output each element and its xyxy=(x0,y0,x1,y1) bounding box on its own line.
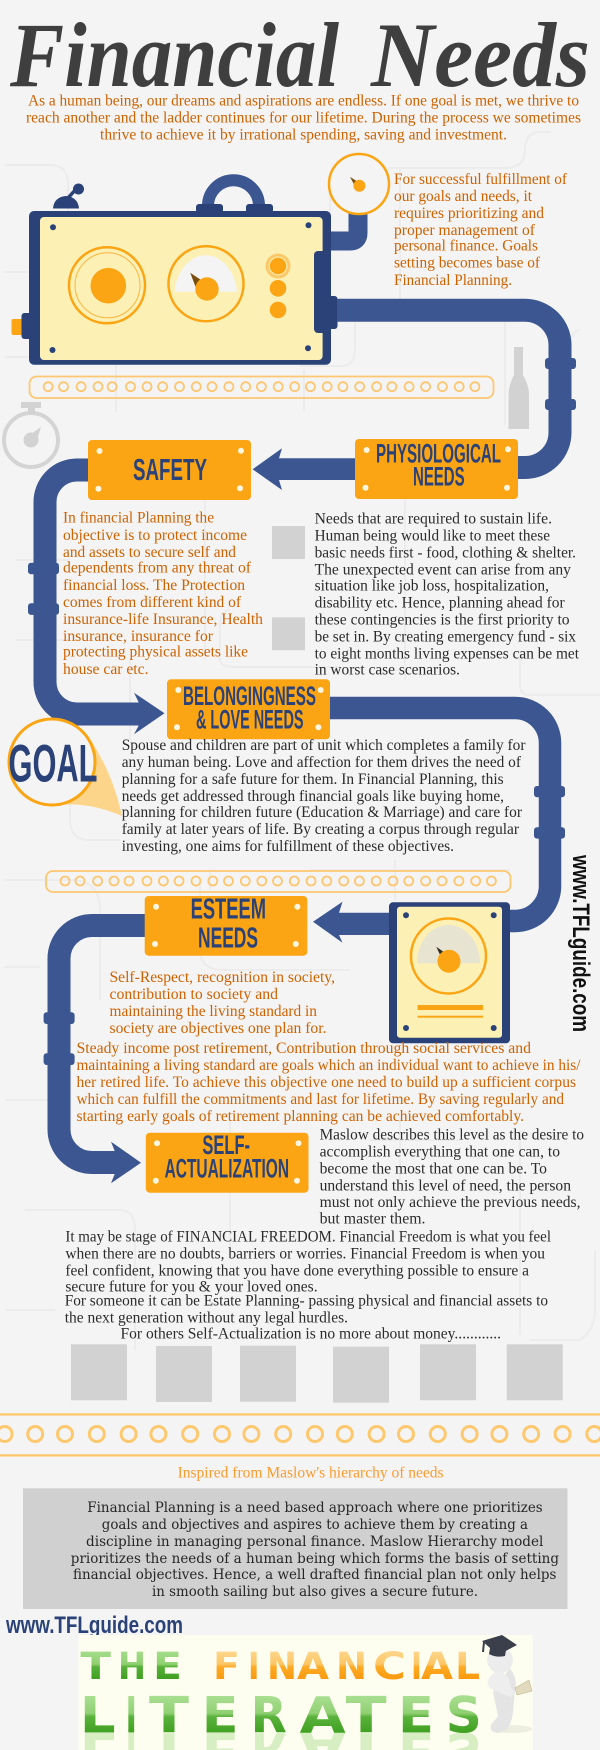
logo: the financial literates: N xyxy=(336,1645,367,1688)
machine xyxy=(12,154,389,365)
text: maslow description xyxy=(320,1127,584,1228)
logo: the financial literates: A xyxy=(300,1687,347,1745)
plate: belongingness and love needs: BELONGINGNESS xyxy=(183,681,316,711)
panel: conclusion: Financial Planning is a need based approach where one prioritizes xyxy=(87,1500,543,1516)
pipe: gauge link xyxy=(331,210,358,241)
text: retirement goals xyxy=(76,1040,581,1125)
text: belongingness: planning for children future (Education & Marriage) and care for xyxy=(122,804,523,821)
top gauge xyxy=(329,154,389,214)
website label: www.TFLguide.com xyxy=(5,1612,183,1639)
icon: stopwatch xyxy=(4,402,58,467)
pipe: machine to physiological xyxy=(337,310,576,468)
plate: esteem needs xyxy=(145,893,307,956)
arrow: gauge to esteem xyxy=(313,902,392,943)
text: goals and needs xyxy=(394,171,568,289)
logo: the financial literates: I xyxy=(126,1687,137,1745)
text: financial freedom: It may be stage of FINANCIAL FREEDOM. Financial Freedom is what you feel xyxy=(65,1229,551,1246)
text: maslow description: accomplish everything that one can, to xyxy=(320,1144,560,1161)
text: safety: financial loss. The Protection xyxy=(63,577,245,594)
logo: the financial literates: E xyxy=(202,1687,239,1745)
panel: conclusion: prioritizes the needs of a human being which forms the basis of setting xyxy=(71,1551,559,1567)
text: physiological: these contingencies is the first priority to xyxy=(315,612,570,629)
logo: the financial literates: I xyxy=(411,1645,422,1688)
panel: conclusion xyxy=(23,1488,568,1609)
plate: physiological needs: PHYSIOLOGICAL xyxy=(376,438,501,468)
pipe: belongingness to esteem xyxy=(328,708,565,921)
logo: the financial literates: E xyxy=(153,1645,182,1688)
vertical website label: www.TFLguide.com xyxy=(567,854,594,1032)
intro text: reach another and the ladder continues for our lifetime. During the process we sometimes xyxy=(26,110,581,127)
text: physiological: The unexpected event can arise from any xyxy=(315,562,571,579)
title xyxy=(9,4,590,106)
logo: the financial literates: N xyxy=(267,1645,297,1688)
background pipe pattern xyxy=(4,132,600,1350)
text: physiological: Human being would like to meet these xyxy=(315,528,550,545)
text: esteem: contribution to society and xyxy=(110,986,278,1003)
text: esteem xyxy=(110,969,335,1037)
text: safety xyxy=(63,510,263,678)
goal badge: GOAL xyxy=(8,735,98,794)
text: goals and needs: Financial Planning. xyxy=(394,272,512,289)
text: maslow description: must not only achieve the previous needs, xyxy=(320,1194,580,1211)
figure with graduation cap xyxy=(482,1635,532,1733)
plate: esteem needs: NEEDS xyxy=(198,923,258,955)
text: goals and needs: requires prioritizing and xyxy=(394,205,544,222)
panel: conclusion: goals and objectives and aspires to achieve them by creating a xyxy=(102,1517,528,1533)
text: financial freedom: the next generation without any legal hurdles. xyxy=(65,1310,348,1327)
text: physiological: be set in. By creating emergency fund - six xyxy=(315,629,576,646)
panel: conclusion: in smooth sailing but also gives a secure future. xyxy=(152,1584,478,1600)
text: safety: and assets to secure self and xyxy=(63,544,236,561)
text: maslow description: understand this level of need, the person xyxy=(320,1178,571,1195)
text: financial freedom: For others Self-Actualization is no more about money............ xyxy=(120,1326,501,1343)
text: safety: objective is to protect income xyxy=(63,527,247,544)
text: goals and needs: setting becomes base of xyxy=(394,255,541,272)
left knob xyxy=(12,313,32,339)
text: retirement goals: maintaining a living standard are goals which an individual want to achieve in his/ xyxy=(76,1057,581,1074)
text: safety: house car etc. xyxy=(63,661,148,678)
goal badge xyxy=(8,719,122,816)
text: belongingness xyxy=(122,737,526,855)
text: belongingness: family at later years of life. By creating a corpus through regular xyxy=(122,821,520,838)
panel: conclusion: discipline in managing personal finance. Maslow Hierarchy model xyxy=(86,1534,543,1550)
text: financial freedom xyxy=(65,1229,551,1343)
credit line: Inspired from Maslow's hierarchy of needs xyxy=(178,1465,444,1482)
icon: lever xyxy=(53,184,84,208)
text: maslow description: Maslow describes this level as the desire to xyxy=(320,1127,584,1144)
middle gauge xyxy=(168,246,244,321)
text: belongingness: planning for a safe future for them. In Financial Planning, this xyxy=(122,771,504,788)
plate: self-actualization: ACTUALIZATION xyxy=(165,1153,289,1183)
logo: the financial literates: A xyxy=(421,1645,453,1688)
plate: self-actualization xyxy=(146,1130,308,1193)
plate: safety: SAFETY xyxy=(133,453,207,487)
logo: the financial literates: I xyxy=(248,1645,260,1688)
text: safety: insurance, insurance for xyxy=(63,628,214,645)
logo: the financial literates: H xyxy=(118,1645,146,1688)
text: retirement goals: Steady income post retirement, Contribution through social services and xyxy=(76,1040,531,1057)
text: belongingness: Spouse and children are part of unit which completes a family for xyxy=(122,737,526,754)
text: financial freedom: secure future for you & your loved ones. xyxy=(65,1279,318,1296)
title: Needs xyxy=(370,4,590,106)
text: financial freedom: when there are no doubts, barriers or worries. Financial Freedom is when you xyxy=(65,1246,545,1263)
text: esteem: society are objectives one plan for. xyxy=(110,1020,326,1037)
pipe: safety to belongingness xyxy=(28,470,164,734)
text: goals and needs: For successful fulfillment of xyxy=(394,171,568,188)
machine body xyxy=(29,211,331,365)
logo: the financial literates xyxy=(78,1635,533,1750)
text: belongingness: needs get addressed through financial goals like buying home, xyxy=(122,788,504,805)
logo: the financial literates: L xyxy=(455,1645,480,1688)
title: Financial xyxy=(9,4,339,106)
text: physiological: situation like job loss, hospitalization, xyxy=(315,578,549,595)
text: belongingness: any human being. Love and affection for them drives the need of xyxy=(122,754,522,771)
gray placeholder row xyxy=(71,1344,563,1403)
intro text xyxy=(26,93,581,144)
plate: physiological needs xyxy=(355,438,518,499)
text: physiological: to eight months living expenses can be met xyxy=(315,646,580,663)
text: physiological: disability etc. Hence, planning ahead for xyxy=(315,595,565,612)
text: goals and needs: proper management of xyxy=(394,222,536,239)
indicator buttons xyxy=(266,254,290,318)
text: maslow description: become the most that one can be. To xyxy=(320,1161,547,1178)
text: safety: dependents from any threat of xyxy=(63,560,252,577)
text: belongingness: investing, one aims for fulfillment of these objectives. xyxy=(122,838,454,855)
plate: safety xyxy=(88,440,251,500)
arrow head xyxy=(134,693,164,734)
logo: the financial literates: T xyxy=(149,1687,189,1745)
text: retirement goals: her retired life. To achieve this objective one need to build up a sufficient corpus xyxy=(76,1074,576,1091)
gray placeholders xyxy=(272,526,305,650)
text: financial freedom: For someone it can be Estate Planning- passing physical and financial assets to xyxy=(65,1293,548,1310)
arrow head xyxy=(111,1142,141,1183)
logo: the financial literates: E xyxy=(398,1687,434,1745)
left dial xyxy=(69,247,145,323)
intro text: thrive to achieve it by irrational spending, saving and investment. xyxy=(100,127,507,144)
ribbon: middle dots xyxy=(46,871,510,892)
logo: the financial literates: T xyxy=(346,1687,387,1745)
text: safety: comes from different kind of xyxy=(63,594,242,611)
plate: belongingness and love needs xyxy=(167,679,330,739)
text: retirement goals: starting early goals of retirement planning can be achieved comfortably. xyxy=(76,1108,524,1125)
text: retirement goals: which can fulfill the commitments and last for lifetime. By saving regularly and xyxy=(76,1091,564,1108)
text: safety: protecting physical assets like xyxy=(63,644,248,661)
logo: the financial literates: T xyxy=(80,1645,112,1688)
plate: esteem needs: ESTEEM xyxy=(191,893,266,925)
logo: the financial literates: R xyxy=(251,1687,287,1745)
text: physiological: basic needs first - food, clothing & shelter. xyxy=(315,545,576,562)
text: goals and needs: our goals and needs, it xyxy=(394,188,533,205)
arrow: physiological to safety xyxy=(253,448,356,490)
pipe: handle xyxy=(208,180,259,210)
text: esteem: maintaining the living standard in xyxy=(110,1003,317,1020)
text: physiological: in worst case scenarios. xyxy=(315,662,460,679)
plate: physiological needs: NEEDS xyxy=(413,462,465,492)
text: physiological: Needs that are required to sustain life. xyxy=(315,511,552,528)
logo: the financial literates: A xyxy=(297,1645,329,1688)
screws xyxy=(50,222,312,353)
right connector xyxy=(314,251,338,333)
text: financial freedom: feel confident, knowing that you have done everything possible to ensure a xyxy=(65,1263,529,1280)
intro text: As a human being, our dreams and aspirations are endless. If one goal is met, we thrive to xyxy=(28,93,579,110)
text: physiological xyxy=(315,511,580,679)
text: safety: insurance-life Insurance, Health xyxy=(63,611,263,628)
text: safety: In financial Planning the xyxy=(63,510,214,527)
gauge box xyxy=(389,902,510,1043)
icon: bottle xyxy=(509,347,529,429)
plate: belongingness and love needs: & LOVE NEEDS xyxy=(196,704,304,734)
ribbon: upper dots xyxy=(30,376,494,398)
text: maslow description: but master them. xyxy=(320,1211,426,1228)
panel: conclusion: financial objectives. Hence, a well drafted financial plan not only helps xyxy=(73,1567,556,1583)
logo: the financial literates: C xyxy=(373,1645,406,1688)
ribbon: full-width dots xyxy=(0,1413,600,1456)
text: esteem: Self-Respect, recognition in society, xyxy=(110,969,335,986)
logo: the financial literates: S xyxy=(446,1687,482,1745)
pipe: esteem to self-actualization xyxy=(44,926,147,1183)
text: goals and needs: personal finance. Goals xyxy=(394,238,538,255)
logo: the financial literates: F xyxy=(213,1645,240,1688)
logo: the financial literates: L xyxy=(80,1687,116,1745)
plate: self-actualization: SELF- xyxy=(202,1130,250,1160)
callout pointer xyxy=(50,742,122,816)
